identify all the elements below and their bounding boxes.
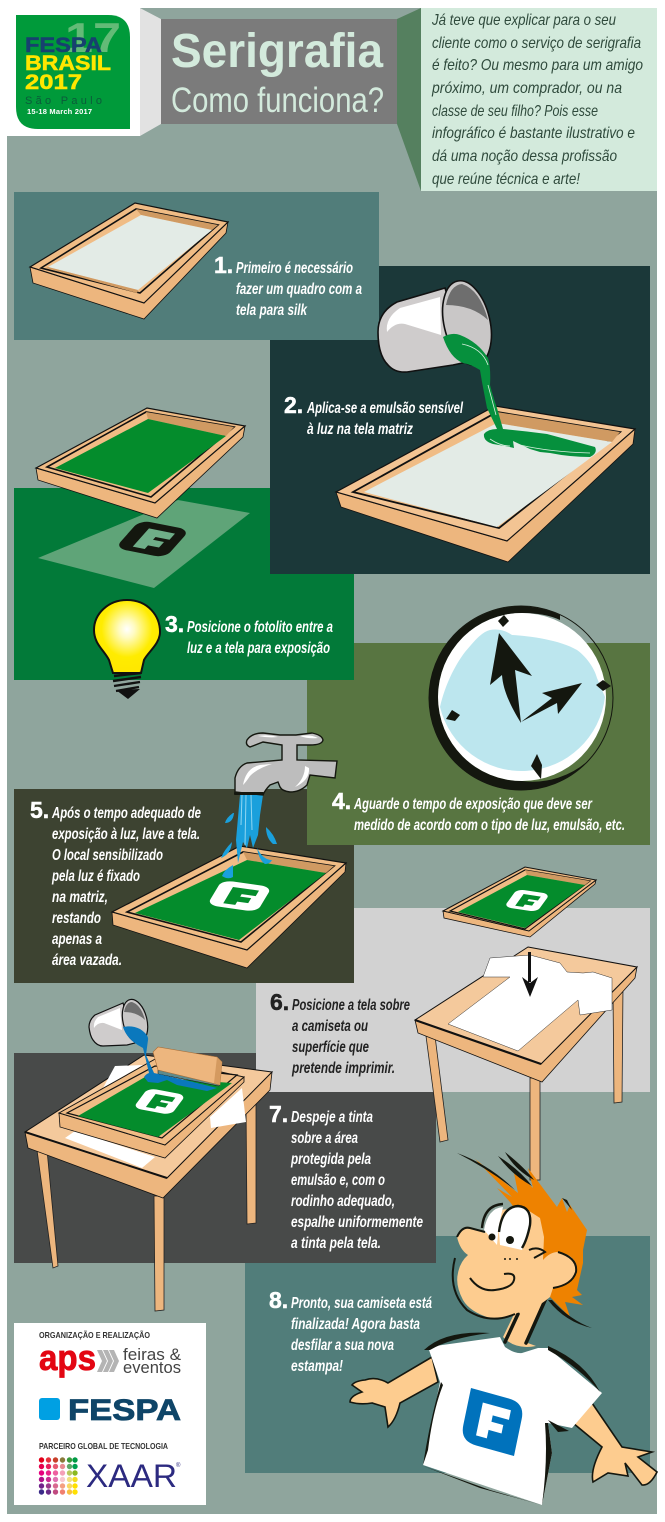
text: step 8 (269, 1287, 432, 1375)
icon: frame with F step 5 (112, 846, 346, 968)
icon: blank frame step 1 (30, 203, 228, 319)
logo: FESPA Brasil 2017: BRASIL (25, 52, 111, 75)
intro text panel: Já teve que explicar para o seu (431, 12, 616, 29)
text: step 7: emulsão e, com o (291, 1172, 385, 1189)
text: step 6 (270, 989, 410, 1077)
panel: step 5 (14, 789, 354, 983)
illustration: character in t-shirt (350, 1152, 657, 1505)
logo on shirt (460, 1388, 525, 1456)
text: step 8: Pronto, sua camiseta está (291, 1295, 432, 1312)
heading: technology partner: PARCEIRO GLOBAL DE TECNOLOGIA (39, 1441, 168, 1451)
logo: FESPA: FESPA (68, 1394, 181, 1427)
text: step 3: luz e a tela para exposição (187, 640, 330, 657)
intro text panel: próximo, um comprador, ou na (431, 80, 622, 97)
logo: aps feiras e eventos: eventos (123, 1358, 181, 1377)
text: step 2: Aplica-se a emulsão sensível (306, 400, 463, 417)
text: step 3: 3. (165, 611, 184, 637)
logo: XAAR (39, 1457, 181, 1495)
icon: frame above table (443, 867, 596, 937)
text: step 7: protegida pela (290, 1151, 371, 1168)
panel: step 7 (14, 1053, 436, 1263)
icon: table with squeegee (25, 1047, 272, 1311)
text: step 8: 8. (269, 1287, 288, 1313)
right arm (573, 1403, 657, 1485)
arrow: down to table (522, 952, 538, 997)
heading: organization: ORGANIZAÇÃO E REALIZAÇÃO (39, 1330, 150, 1340)
panel: sponsors (14, 1323, 206, 1505)
text: step 5: pela luz é fixado (51, 868, 140, 885)
logo: FESPA Brasil 2017: 17 (65, 14, 121, 61)
text: step 5: área vazada. (52, 952, 122, 969)
title: Serigrafia (171, 25, 383, 78)
intro text panel: infográfico é bastante ilustrativo e (432, 125, 635, 142)
icon: bucket with emulsion (378, 276, 596, 457)
t-shirt (423, 1337, 602, 1505)
text: step 5: O local sensibilizado (52, 847, 163, 864)
text: step 4 (332, 788, 625, 834)
text: step 7: 7. (269, 1101, 288, 1127)
text: step 5: na matriz, (52, 889, 108, 906)
panel: step 6 (256, 908, 650, 1092)
icon: faucet and water (221, 733, 337, 878)
text: step 3 (165, 611, 333, 657)
logo: XAAR: ® (176, 1462, 181, 1469)
logo: FESPA Brasil 2017 (16, 14, 130, 129)
text: step 7: rodinho adequado, (291, 1193, 395, 1210)
text: step 3: Posicione o fotolito entre a (187, 619, 333, 636)
text: step 7: espalhe uniformemente (291, 1214, 423, 1231)
logo: FESPA Brasil 2017: São Paulo (25, 95, 102, 107)
panel: step 8 (245, 1236, 650, 1473)
text: step 5: 5. (30, 797, 49, 823)
logo: aps feiras e eventos: feiras & (123, 1345, 182, 1364)
text: step 8: estampa! (291, 1358, 343, 1375)
icon: table with t-shirt (415, 947, 637, 1180)
title panel (161, 19, 397, 124)
left arm (350, 1357, 438, 1427)
icon: bucket with blue ink (89, 997, 217, 1091)
text: step 5: exposição à luz, lave a tela. (52, 826, 200, 843)
logo: FESPA Brasil 2017: FESPA (25, 34, 102, 57)
panel: step 2 (270, 266, 650, 574)
text: step 5 (30, 797, 201, 969)
text: step 5: Após o tempo adequado de (51, 805, 201, 822)
text: step 2 (284, 392, 463, 438)
header bevel right (397, 8, 421, 191)
intro text panel: que reúne técnica e arte! (432, 171, 580, 188)
intro text panel: classe de seu filho? Pois esse (432, 103, 598, 120)
text: step 1: 1. (214, 252, 233, 278)
icon: clock (429, 606, 613, 790)
logo: FESPA Brasil 2017: 2017 (25, 71, 82, 94)
text: step 5: restando (52, 910, 101, 927)
text: step 7: Despeje a tinta (291, 1109, 373, 1126)
subtitle: Como funciona? (171, 81, 384, 120)
panel: step 4 (307, 643, 650, 845)
icon: film with F (38, 500, 250, 588)
text: step 6: 6. (270, 989, 289, 1015)
text: step 5: apenas a (52, 931, 102, 948)
text: step 8: desfilar a sua nova (291, 1337, 394, 1354)
text: step 8: finalizada! Agora basta (291, 1316, 420, 1333)
text: step 7: a tinta pela tela. (291, 1235, 381, 1252)
text: step 6: superfície que (292, 1039, 369, 1056)
text: step 6: Posicione a tela sobre (292, 997, 410, 1014)
text: step 1: Primeiro é necessário (236, 260, 353, 277)
text: step 4: 4. (332, 788, 351, 814)
text: step 7 (269, 1101, 423, 1252)
intro text panel (421, 8, 657, 191)
text: step 1 (214, 252, 362, 319)
logo: aps feiras e eventos (39, 1337, 182, 1378)
logo: FESPA (39, 1394, 181, 1427)
hair (475, 1159, 587, 1317)
text: step 2: 2. (284, 392, 303, 418)
neck (503, 1298, 548, 1347)
text: step 1: tela para silk (236, 302, 308, 319)
text: step 6: pretende imprimir. (291, 1060, 395, 1077)
logo: XAAR: XAAR (86, 1458, 177, 1494)
icon: light bulb (94, 600, 160, 699)
text: step 6: a camiseta ou (292, 1018, 368, 1035)
icon: frame with emulsion (36, 408, 245, 518)
header bevel left (140, 8, 161, 136)
face (457, 1207, 577, 1318)
text: step 7: sobre a área (291, 1130, 358, 1147)
logo: aps feiras e eventos: aps (39, 1337, 96, 1378)
panel: step 3 (14, 488, 354, 680)
logo: FESPA Brasil 2017: 15-18 March 2017 (27, 107, 92, 116)
eyes (484, 1207, 503, 1245)
intro text panel: dá uma noção dessa profissão (432, 148, 617, 165)
text: step 1: fazer um quadro com a (236, 281, 362, 298)
text: step 2: à luz na tela matriz (307, 421, 413, 438)
icon: frame step 2 (336, 406, 635, 562)
panel: step 1 (14, 192, 379, 340)
